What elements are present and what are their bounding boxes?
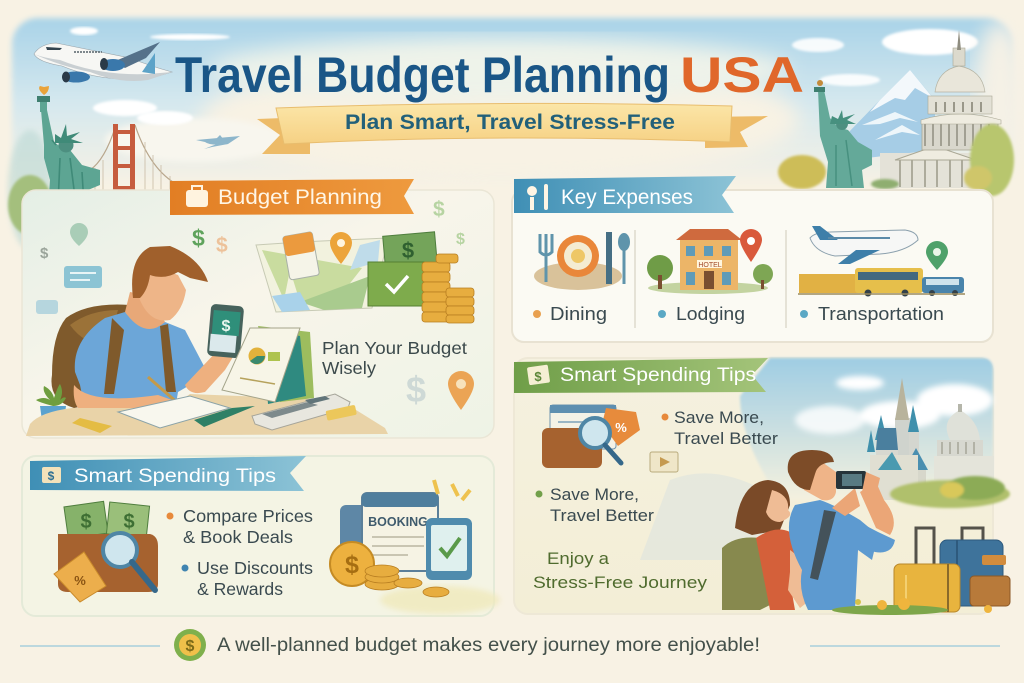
section header: smart spending tips right [514,358,768,393]
tip: compare prices: & Book Deals [183,527,293,547]
tip: save more top: Save More, [674,408,764,427]
title: USA [680,47,804,103]
capitol building [880,30,1001,188]
icon: booking calendar and phone [330,480,472,597]
section header: smart spending tips: $ [48,469,55,483]
section header: smart spending tips right: Smart Spending Tips [560,364,756,386]
decorative dollar signs: $ [433,198,445,221]
decorative dollar signs: $ [406,369,426,410]
icon: lodging hotel [647,229,773,294]
tip: compare prices [166,506,313,547]
map with pins [256,232,388,312]
potted plant [36,384,66,428]
icon: lodging hotel: HOTEL [698,262,722,269]
tip: save more top: Travel Better [674,429,778,448]
small video icon [650,452,678,472]
tip: use discounts: & Rewards [197,579,283,599]
icon: wallet with cash and magnifier: $ [123,511,135,533]
panel: smart spending tips right [514,358,1010,615]
small chat icons [36,223,102,314]
icon: wallet with cash and magnifier: % [74,573,86,588]
wallet, cash and coins: $ [402,238,414,263]
decorative dollar signs [40,198,465,410]
icon: dollar coin [174,629,206,661]
watercolor sky [8,18,1024,250]
icon: wallet with cash and magnifier [54,501,158,602]
backpack [51,305,130,408]
icon: airplane top left [34,42,172,82]
decorative dollar signs: $ [192,225,205,251]
yellow book [72,418,112,433]
phone: $ [222,318,231,335]
woman's shirt [756,530,804,610]
panel: smart spending tips left [22,456,500,616]
wallet, cash and coins [368,232,474,323]
tip: save more bottom: Travel Better [550,506,654,525]
label: transportation: Transportation [818,304,944,324]
luggage [894,528,1010,612]
wallet and magnifier icon: % [615,420,627,435]
section header: smart spending tips [30,456,306,491]
location pin [448,371,474,410]
cloud decoration [795,376,993,434]
icon: dollar coin: $ [186,638,195,655]
label: dining [533,304,607,324]
section header: smart spending tips: Smart Spending Tips [74,465,276,487]
icon: dining plate [534,232,630,290]
decorative dollar signs: $ [216,234,228,257]
mountains [846,70,935,160]
foreground flowers [832,598,992,615]
wallet and magnifier icon [542,405,640,468]
castle and dome skyline [640,378,1010,560]
footer tagline: A well-planned budget makes every journey more enjoyable! [217,635,760,656]
label: lodging: Lodging [676,304,745,324]
phone [207,304,244,358]
open notebook [118,396,230,428]
tip: save more top [662,408,778,448]
caption: enjoy a stress-free journey [533,549,708,592]
tip: compare prices: Compare Prices [183,506,313,526]
caption: wisely: Wisely [322,358,376,378]
calculator [252,394,350,430]
label: dining: Dining [550,304,607,324]
section header: key expenses [514,176,736,213]
subtitle ribbon [257,103,768,154]
small airplane [196,135,240,149]
statue of liberty left [28,86,108,224]
traveler figure [74,246,244,418]
section header: budget planning: Budget Planning [218,186,382,209]
subtitle ribbon: Plan Smart, Travel Stress-Free [345,111,675,134]
travelers couple [722,450,895,610]
desk with notebooks and calculator [26,326,388,436]
decorative dollar signs: $ [40,245,49,262]
icon: booking calendar and phone: BOOKING [368,515,428,529]
section header: budget planning [170,179,414,215]
man's shirt and arm [789,500,878,610]
tip: save more bottom [536,485,654,525]
caption: enjoy a stress-free journey: Stress-Free Journey [533,573,708,592]
panel: key expenses [512,176,993,342]
trees right [778,124,1014,196]
man's head [800,462,836,500]
golden gate bridge [90,124,186,224]
tip: save more bottom: Save More, [550,485,639,504]
section header: smart spending tips right: $ [534,369,542,384]
woman's backpack [722,537,780,610]
icon: wallet with cash and magnifier: $ [80,511,92,533]
title: Travel Budget Planning [175,47,670,103]
report on stand [258,326,314,402]
icon: transportation [798,226,965,296]
woman's hair and face [735,480,790,535]
icon: booking calendar and phone: $ [345,551,359,579]
tip: use discounts: Use Discounts [197,558,313,578]
statue of liberty right [814,80,872,188]
section header: key expenses: Key Expenses [561,186,693,209]
caption: plan your budget: Plan Your Budget [322,338,467,358]
caption: enjoy a stress-free journey: Enjoy a [547,549,610,568]
footer tagline [20,629,1000,661]
decorative dollar signs: $ [456,231,465,248]
panel: budget planning [22,179,494,438]
tip: use discounts [182,558,313,599]
tree left [8,175,52,235]
